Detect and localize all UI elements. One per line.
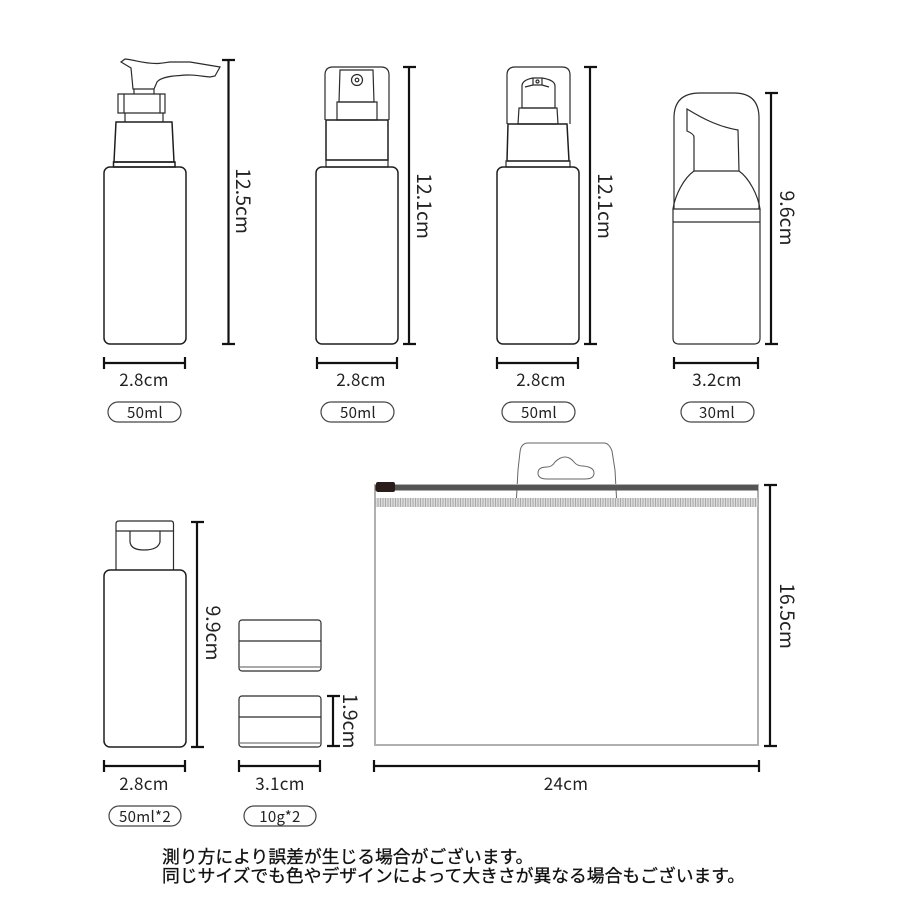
pill: spray capacity: [321, 402, 394, 423]
dimension: lotion pump height: 12.1cm: [592, 173, 621, 239]
dimension: spray width: 2.8cm: [336, 366, 386, 391]
pill: pump capacity: 50ml: [127, 402, 163, 423]
dimension: pump height: 12.5cm: [230, 168, 259, 234]
dimension: lotion pump width: [497, 357, 578, 391]
dimension: flip cap width: 2.8cm: [119, 770, 169, 795]
dimension: foam height: [765, 93, 803, 344]
pill: foam capacity: [681, 402, 754, 423]
pill: foam capacity: 30ml: [699, 402, 735, 423]
zipper slider: [376, 482, 395, 492]
pill: pump capacity: [108, 402, 181, 423]
pill: jar capacity: 10g*2: [259, 806, 301, 827]
dimension: bag height: [764, 485, 803, 746]
zipper bag: [375, 443, 758, 745]
footnote: 同じサイズでも色やデザインによって大きさが異なる場合もございます。: [162, 862, 745, 888]
jar: lower: [239, 696, 321, 747]
dimension: spray width: [317, 357, 397, 391]
bottle: lotion pump: [497, 67, 579, 344]
hatched seal: [375, 498, 758, 507]
bottle: flip cap: [104, 521, 186, 747]
pill: lotion pump capacity: [502, 402, 575, 423]
dimension: jar width: 3.1cm: [255, 770, 305, 795]
dimension: flip cap height: [191, 522, 229, 747]
dimension: bag width: [374, 760, 759, 795]
bottle: foam: [673, 93, 760, 344]
dimension: bag width: 24cm: [544, 770, 588, 795]
pill: jar capacity: [244, 806, 316, 827]
bottle: pump: [104, 59, 220, 344]
dimension: foam height: 9.6cm: [774, 190, 803, 246]
dimension: flip cap width: [104, 760, 185, 795]
dimension: pump height: [222, 60, 259, 344]
dimension: spray height: 12.1cm: [411, 173, 440, 239]
bottle: spray: [316, 67, 398, 344]
dimension: pump width: [104, 357, 185, 391]
dimension: foam width: [674, 357, 758, 391]
footnote: [162, 843, 745, 888]
zipper track: [375, 485, 758, 490]
dimension: bag height: 16.5cm: [774, 583, 803, 649]
pill: lotion pump capacity: 50ml: [521, 402, 557, 423]
dimension: pump width: 2.8cm: [119, 366, 169, 391]
hanger hole: [538, 457, 594, 479]
footnote: 測り方により誤差が生じる場合がございます。: [162, 843, 533, 869]
dimension: foam width: 3.2cm: [692, 366, 742, 391]
dimension: flip cap height: 9.9cm: [200, 605, 229, 661]
dimension: lotion pump height: [584, 67, 621, 344]
pill: spray capacity: 50ml: [340, 402, 376, 423]
jar: upper: [239, 620, 321, 671]
bag body: [375, 485, 758, 745]
dimension: lotion pump width: 2.8cm: [516, 366, 566, 391]
dimension: spray height: [403, 67, 440, 344]
pill: flip cap capacity: 50ml*2: [119, 806, 171, 827]
dimension: jar height: 1.9cm: [337, 693, 366, 749]
bag hanger tab: [516, 443, 617, 507]
dimension: jar width: [239, 760, 320, 795]
